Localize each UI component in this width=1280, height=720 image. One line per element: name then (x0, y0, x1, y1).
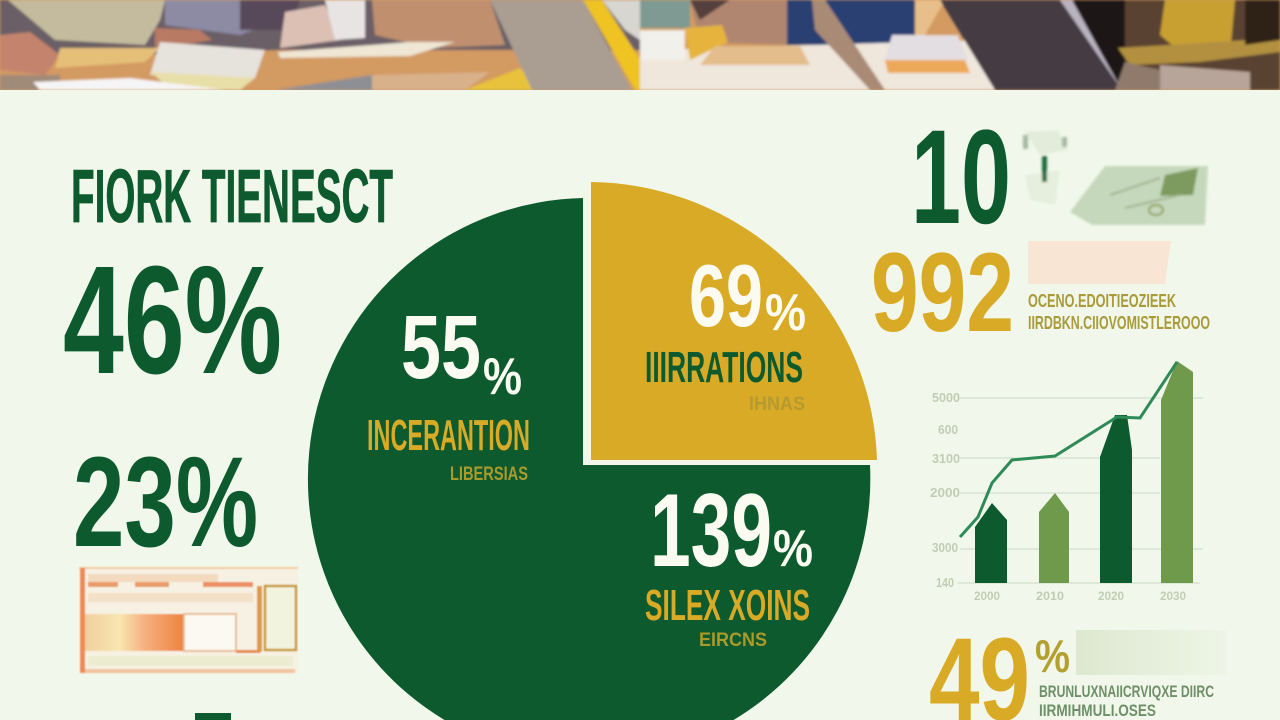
pie chart (308, 182, 877, 720)
photo banner: students at a table (0, 0, 1280, 90)
grid lines (958, 398, 1203, 583)
label: small green-yellow caption: EIRCNS (699, 630, 767, 651)
bar and line chart (930, 361, 1203, 603)
label: silex koins: SILEX XOINS (645, 581, 810, 630)
bars (975, 503, 1007, 583)
fragment of clipped number (195, 713, 231, 720)
label: 69%: % (765, 284, 806, 342)
stat: 992: 992 (871, 230, 1014, 355)
map-like image thumbnail (1023, 130, 1208, 225)
stat: 46%: 46% (63, 234, 282, 406)
caption beside 49%: IIRMIHMULI.OSES (1039, 701, 1156, 720)
label: 139%: 139 (650, 473, 772, 589)
stat: 49%: % (1035, 630, 1070, 682)
stat: 23%: 23% (73, 431, 258, 574)
x axis labels: 2000 (974, 589, 1000, 603)
trend line (960, 362, 1177, 537)
y axis labels: 3000 (932, 540, 958, 555)
y axis labels (930, 390, 960, 590)
label: 55%: 55 (401, 298, 481, 398)
x axis labels: 2010 (1036, 589, 1064, 603)
orange table thumbnail (79, 567, 298, 674)
pie slice: yellow (591, 182, 877, 460)
label: 55%: % (483, 348, 522, 406)
stat: 10: 10 (911, 103, 1011, 252)
pale green swatch (1076, 630, 1226, 675)
label: incrementation: INCERANTION (367, 411, 530, 460)
x axis labels (974, 589, 1186, 603)
y axis labels: 600 (938, 422, 958, 437)
pie slice: green (308, 198, 870, 720)
label: small yellow caption: LIBERSIAS (450, 464, 528, 485)
y axis labels: 5000 (932, 390, 960, 405)
label: small caption on yellow: IHNAS (749, 394, 805, 415)
heading: FIORK TIENESCT (71, 154, 393, 238)
y axis labels: 2000 (930, 485, 960, 500)
label: 139%: % (773, 520, 813, 578)
caption beside 49% (1039, 682, 1214, 720)
label: 69%: 69 (689, 246, 763, 345)
y axis labels: 140 (936, 575, 954, 590)
x axis labels: 2020 (1098, 589, 1124, 603)
caption beside 49%: BRUNLUXNAIICRVIQXE DIIRC (1039, 682, 1214, 701)
peach swatch (1028, 241, 1171, 284)
caption beside 992 (1028, 291, 1210, 333)
caption beside 992: OCENO.EDOITIEOZIEEK (1028, 291, 1176, 311)
x axis labels: 2030 (1160, 589, 1186, 603)
y axis labels: 3100 (932, 451, 960, 466)
label: inurations: IIIRRATIONS (645, 343, 803, 392)
